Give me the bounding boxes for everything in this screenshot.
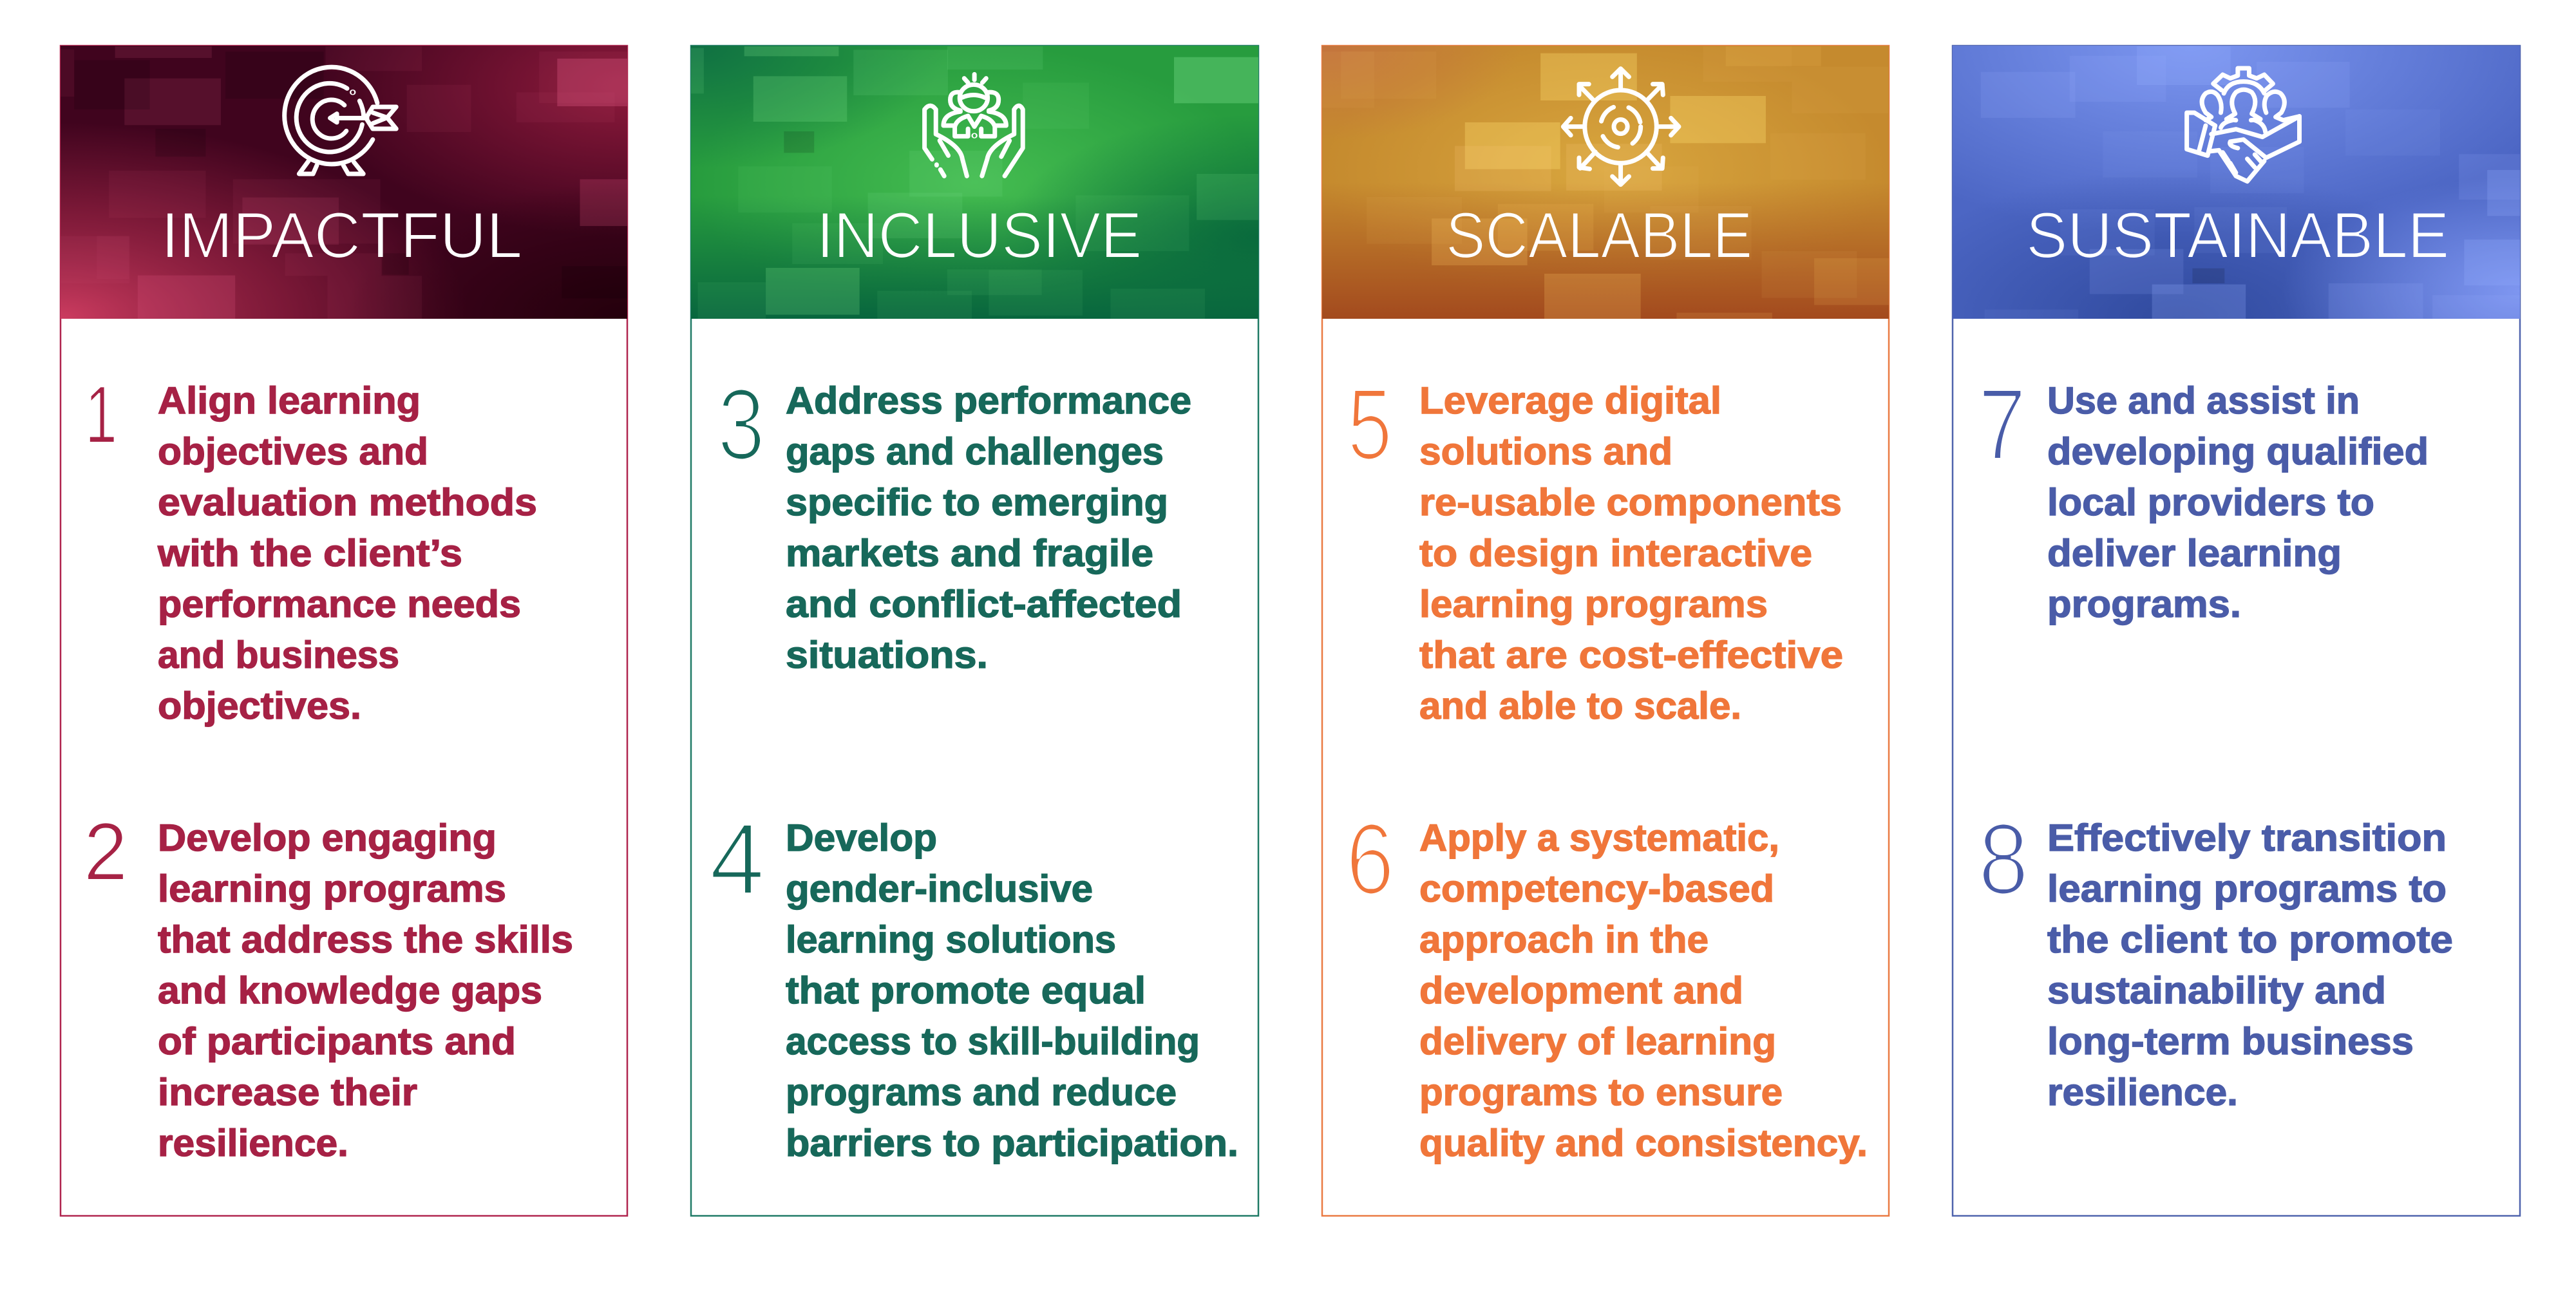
number 2: 2 (84, 806, 128, 897)
text block 7: local providers to (2047, 481, 2374, 524)
icon: people held in hands (925, 74, 1023, 176)
text block 4: gender-inclusive (786, 867, 1093, 910)
panel: scalable (1321, 46, 1889, 1216)
text block 1: objectives. (158, 685, 361, 727)
text block 2: learning programs (158, 867, 506, 910)
icon: target with arrow (285, 67, 396, 174)
text block 1: with the client’s (157, 532, 462, 574)
text block 7: developing qualified (2047, 430, 2429, 473)
text block 3 (786, 379, 1191, 676)
text block 6: programs to ensure (1419, 1071, 1783, 1113)
text block 4: learning solutions (786, 918, 1116, 961)
text block 1: performance needs (158, 583, 521, 625)
header: sustainable background (1953, 46, 2521, 319)
text block 6: approach in the (1419, 918, 1709, 961)
text block 8: long-term business (2047, 1020, 2414, 1063)
text block 4: programs and reduce (786, 1071, 1177, 1113)
text block 3: Address performance (786, 379, 1191, 422)
panel: impactful (60, 46, 627, 1216)
text block 1: evaluation methods (158, 481, 537, 524)
header: scalable background (1321, 46, 1889, 319)
text block 5: Leverage digital (1419, 379, 1721, 422)
text block 3: gaps and challenges (786, 430, 1164, 473)
text block 5: solutions and (1419, 430, 1672, 473)
number 1: 1 (85, 369, 117, 460)
text block 3: situations. (786, 634, 988, 676)
text block 2: of participants and (158, 1020, 516, 1063)
text block 6: quality and consistency. (1419, 1122, 1868, 1164)
text block 5: and able to scale. (1419, 685, 1741, 727)
number 6: 6 (1346, 803, 1394, 916)
heading: impactful: IMPACTFUL (161, 200, 522, 272)
number 5: 5 (1347, 368, 1392, 481)
text block 3: specific to emerging (786, 481, 1168, 524)
text block 8 (2047, 817, 2453, 1113)
text block 1 (157, 379, 537, 727)
text block 8: resilience. (2047, 1071, 2238, 1113)
header: impactful background (60, 46, 627, 319)
text block 8: learning programs to (2047, 867, 2447, 910)
text block 2: and knowledge gaps (158, 969, 542, 1012)
heading: sustainable: SUSTAINABLE (2026, 200, 2449, 272)
text block 3: and conflict-affected (786, 583, 1182, 625)
number 4: 4 (710, 803, 764, 916)
text block 7: programs. (2047, 583, 2241, 625)
text block 8: the client to promote (2047, 918, 2453, 961)
text block 7: deliver learning (2047, 532, 2342, 574)
text block 7 (2047, 379, 2429, 625)
header: inclusive background (691, 46, 1258, 319)
text block 8: Effectively transition (2047, 817, 2447, 859)
text block 4: barriers to participation. (786, 1122, 1238, 1164)
text block 6: Apply a systematic, (1419, 817, 1779, 859)
text block 2: that address the skills (158, 918, 573, 961)
text block 1: objectives and (158, 430, 428, 473)
text block 1: and business (158, 634, 399, 676)
text block 2: Develop engaging (158, 817, 497, 859)
text block 2: resilience. (158, 1122, 348, 1164)
text block 5: learning programs (1419, 583, 1768, 625)
text block 2 (158, 817, 573, 1164)
text block 4: that promote equal (786, 969, 1146, 1012)
text block 7: Use and assist in (2047, 379, 2360, 422)
panel: sustainable (1953, 46, 2521, 1216)
text block 6: development and (1419, 969, 1743, 1012)
number 3: 3 (717, 368, 765, 481)
text block 4 (786, 817, 1238, 1164)
text block 5 (1419, 379, 1843, 727)
panel: inclusive (691, 46, 1258, 1216)
text block 5: re-usable components (1419, 481, 1842, 524)
text block 1: Align learning (158, 379, 421, 422)
icon: expanding circle with arrows (1563, 69, 1679, 185)
text block 5: to design interactive (1419, 532, 1812, 574)
text block 6: delivery of learning (1419, 1020, 1776, 1063)
text block 4: access to skill-building (786, 1020, 1200, 1063)
heading: inclusive: INCLUSIVE (817, 200, 1142, 272)
text block 3: markets and fragile (786, 532, 1153, 574)
text block 6 (1419, 817, 1868, 1164)
icon: gear, people and handshake (2187, 68, 2300, 182)
number 7: 7 (1978, 368, 2026, 481)
heading: scalable: SCALABLE (1446, 200, 1752, 272)
text block 8: sustainability and (2047, 969, 2386, 1012)
number 8: 8 (1978, 803, 2029, 916)
text block 5: that are cost-effective (1419, 634, 1843, 676)
text block 4: Develop (786, 817, 937, 859)
text block 6: competency-based (1419, 867, 1774, 910)
text block 2: increase their (158, 1071, 417, 1113)
